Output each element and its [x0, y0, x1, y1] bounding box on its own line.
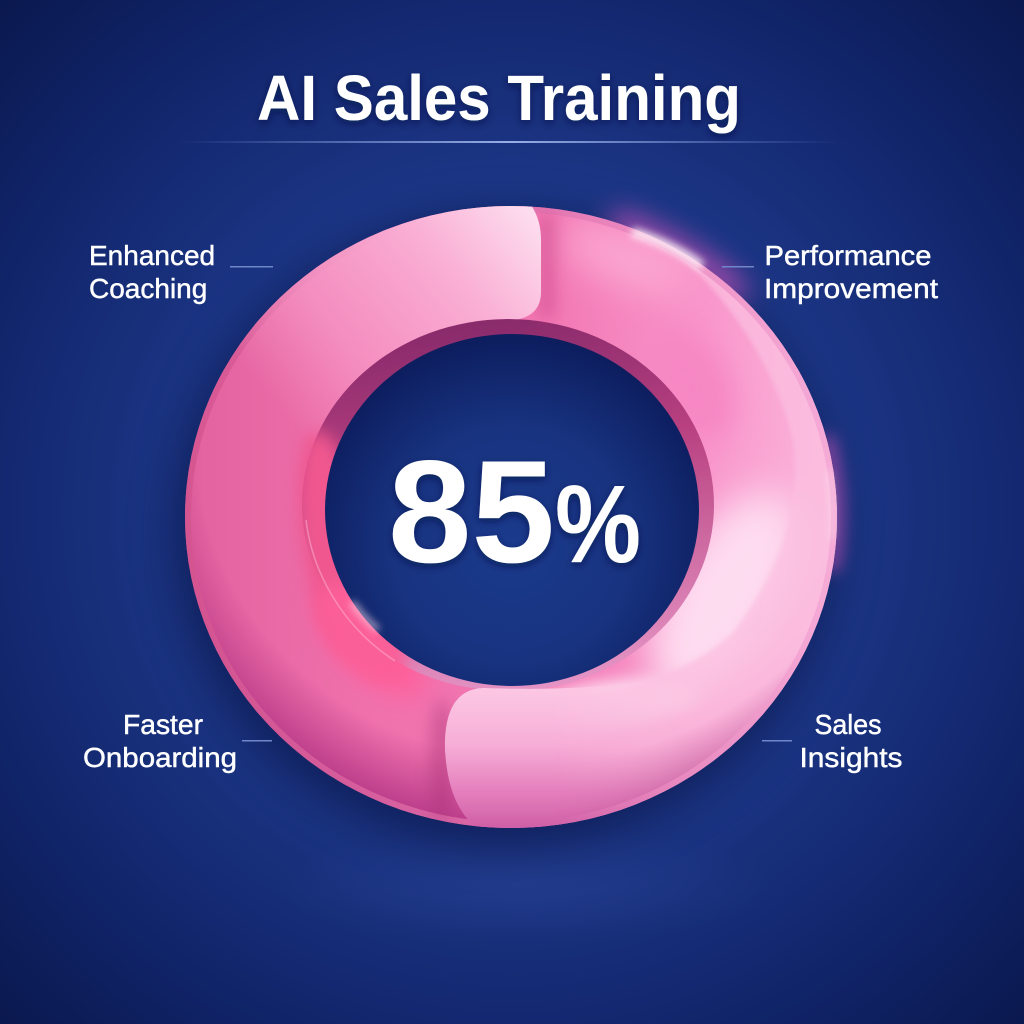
glow: top right	[612, 221, 741, 297]
label: faster onboarding: Onboarding	[83, 742, 237, 773]
ring base	[180, 200, 845, 835]
label: performance improvement	[722, 240, 938, 304]
right light band	[562, 263, 837, 824]
edge shading	[192, 522, 788, 828]
label: sales insights	[762, 709, 902, 773]
highlight: right edge	[829, 470, 833, 540]
value: 85%: %	[555, 463, 641, 586]
title: AI Sales Training	[257, 62, 741, 134]
center hole	[325, 334, 699, 686]
segment shadow: right of top tab	[540, 214, 554, 318]
segment: bottom tab shadow	[430, 700, 454, 820]
value: 85%	[388, 430, 641, 593]
label: sales insights: Sales	[814, 709, 882, 740]
label: enhanced coaching: Coaching	[89, 273, 207, 304]
outer rim	[185, 206, 837, 828]
ring lighting	[384, 666, 426, 698]
bevel ring	[302, 319, 714, 691]
value: 85%: 85	[388, 430, 555, 593]
label: sales insights: Insights	[800, 742, 902, 773]
donut chart	[173, 180, 860, 850]
label: performance improvement: Improvement	[764, 273, 938, 304]
segment: enhanced coaching tab	[244, 206, 541, 424]
label: performance improvement: Performance	[764, 240, 932, 271]
glow: right edge	[826, 436, 837, 571]
label: enhanced coaching: Enhanced	[89, 240, 215, 271]
segment: sales insights tab	[444, 687, 628, 828]
label: enhanced coaching	[89, 240, 273, 304]
highlight: inner left	[352, 602, 378, 630]
highlight: top right edge	[632, 232, 702, 266]
label: faster onboarding	[83, 709, 272, 773]
label: faster onboarding: Faster	[123, 709, 203, 740]
